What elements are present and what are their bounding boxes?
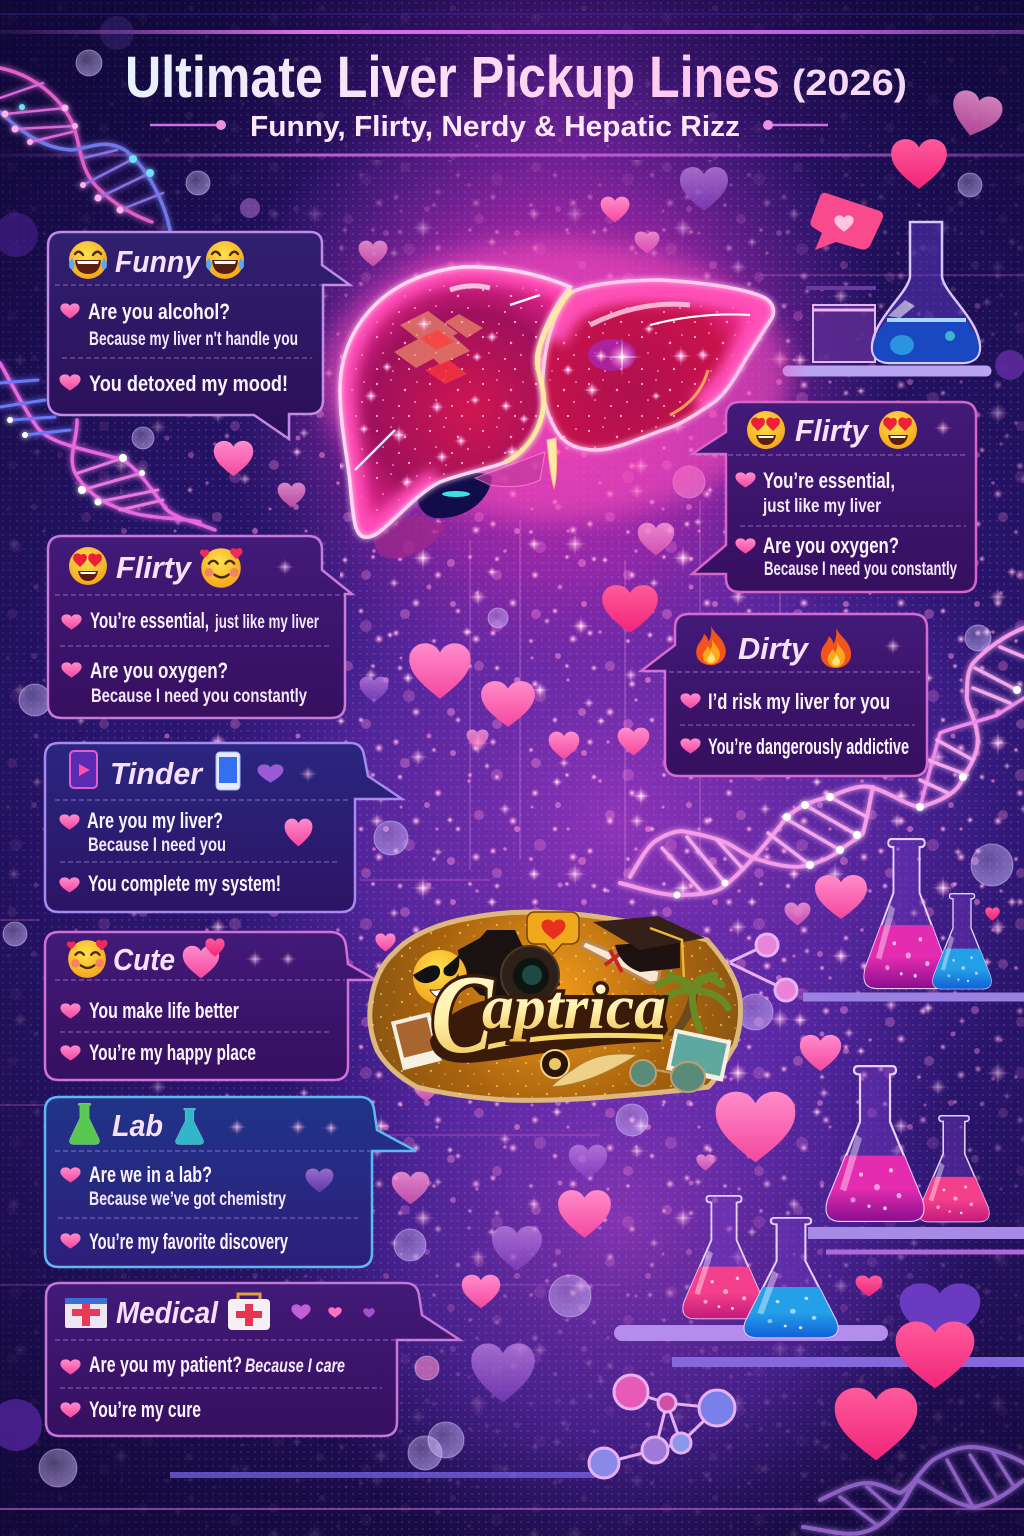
funny line two: You detoxed my mood!: [89, 371, 288, 396]
medical line one: Are you my patient?: [89, 1352, 242, 1377]
icon: diploma: [581, 941, 660, 983]
large hearts: bottom right: [835, 1283, 980, 1460]
panel: medical: [46, 1283, 460, 1436]
dna strand: left: [0, 363, 215, 530]
subtitle: Funny, Flirty, Nerdy & Hepatic Rizz: [250, 111, 740, 143]
panel: dirty: [641, 614, 927, 776]
icon: phone right: [216, 752, 240, 790]
icon: teal flask: [175, 1108, 204, 1145]
flirty right line one detail: just like my liver: [762, 496, 881, 517]
cute heading: Cute: [113, 942, 175, 977]
flirty left line two detail: Because I need you constantly: [91, 686, 307, 707]
funny heading: Funny: [115, 244, 202, 279]
icon: camera: [458, 930, 560, 1005]
liver illustration: [320, 240, 797, 569]
left lobe: [334, 260, 575, 544]
icon: sunglasses emoji: [413, 950, 467, 1004]
dirty line one: I’d risk my liver for you: [708, 689, 890, 714]
lab line one: Are we in a lab?: [89, 1162, 212, 1187]
icon: aperture: [541, 1050, 569, 1078]
liver centre ligament: [505, 290, 572, 462]
tinder line two: You complete my system!: [88, 871, 281, 896]
panel: tinder: [45, 743, 402, 912]
flirty left line one detail: just like my liver: [214, 612, 319, 633]
lab flasks: middle right: [803, 839, 1024, 997]
icon: green flask: [69, 1103, 100, 1144]
medical heading: Medical: [116, 1295, 219, 1330]
icon: laughing emoji left: [69, 241, 107, 279]
dna strand: bottom right: [803, 1447, 1024, 1534]
dirty line two: You’re dangerously addictive: [708, 734, 909, 759]
icon: heart-eyes emoji: [69, 547, 107, 585]
icon: smiling hearts emoji: [200, 548, 242, 588]
icon: heart-eyes emoji right: [879, 411, 917, 449]
dna strand: right: [620, 628, 1024, 898]
molecules: [589, 934, 797, 1478]
flirty heading: Flirty: [795, 413, 870, 448]
floating hearts: [214, 87, 1005, 1403]
lab flasks: top right: [788, 222, 986, 371]
lab flasks: bottom: [622, 1196, 1024, 1362]
icon: palm tree: [658, 975, 728, 1037]
icon: beaker: [806, 288, 876, 362]
logo wordmark: C: [431, 953, 494, 1077]
medical line one detail: Because I care: [245, 1356, 345, 1377]
title: Ultimate Liver Pickup Lines: [125, 45, 780, 110]
panel: cute: [45, 932, 376, 1080]
panel: flirty right: [692, 402, 976, 592]
lab line one detail: Because we’ve got chemistry: [89, 1189, 286, 1210]
icon: flame left: [696, 626, 726, 665]
speech icon: heart chat: [810, 193, 883, 250]
icon: polaroid right: [666, 1029, 732, 1082]
logo wordmark: [430, 953, 668, 1077]
lab heading: Lab: [112, 1108, 163, 1143]
icon: round flask: [872, 222, 980, 363]
icon: flame right: [821, 628, 851, 668]
tinder line one detail: Because I need you: [88, 835, 226, 856]
logo: captrica: [360, 905, 750, 1105]
icon: hospital: [65, 1298, 107, 1328]
tinder line one: Are you my liver?: [87, 808, 223, 833]
icon: graduation cap: [593, 916, 705, 980]
icon: first aid kit: [228, 1294, 270, 1330]
flirty right line one: You’re essential,: [763, 468, 895, 493]
lab line two: You’re my favorite discovery: [89, 1229, 289, 1254]
tinder heading: Tinder: [110, 756, 204, 791]
flirty heading: Flirty: [116, 550, 193, 585]
icon: laughing emoji right: [206, 241, 244, 279]
lower lobe and gallbladder: [374, 438, 557, 559]
icon: feather: [551, 1054, 637, 1087]
funny line one detail: Because my liver n't handle you: [89, 329, 298, 350]
icon: hearts: [183, 938, 225, 978]
right lobe: [540, 275, 797, 466]
cute line one: You make life better: [89, 998, 239, 1023]
icon: sunglasses: [630, 1060, 705, 1092]
panel: funny: [48, 232, 350, 439]
icon: polaroid left: [391, 1012, 442, 1070]
icon: phone left: [70, 751, 97, 788]
lab flasks: lower right: [808, 1066, 1024, 1252]
dna strand: top left: [0, 68, 170, 230]
icon: heart-eyes emoji left: [747, 411, 785, 449]
flirty left line two: Are you oxygen?: [90, 658, 228, 683]
panel: lab: [45, 1097, 416, 1267]
title: (2026): [792, 62, 907, 103]
flirty right line two: Are you oxygen?: [763, 533, 899, 558]
funny line one: Are you alcohol?: [88, 299, 230, 324]
flirty left line one: You’re essential,: [90, 608, 209, 633]
panel: flirty left: [48, 536, 352, 718]
icon: smiling hearts emoji: [67, 940, 108, 978]
medical line two: You’re my cure: [89, 1397, 201, 1422]
icon: heart bubble: [527, 912, 579, 954]
logo wordmark: aptrica: [482, 974, 666, 1042]
cute line two: You’re my happy place: [89, 1040, 256, 1065]
dirty heading: Dirty: [738, 631, 810, 666]
